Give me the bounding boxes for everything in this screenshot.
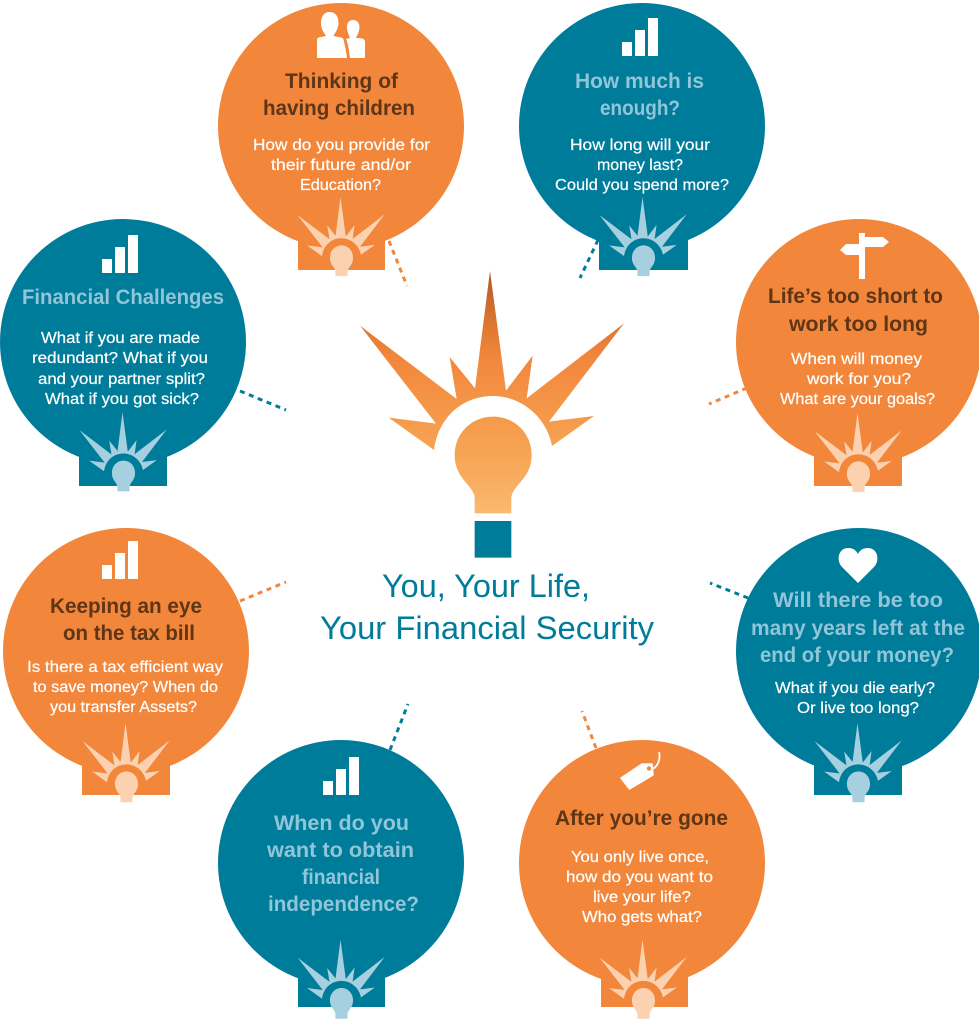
heading: [50, 595, 202, 645]
heading: How much is: [575, 70, 704, 93]
panel: financial challenges: [0, 219, 246, 491]
title: [320, 568, 654, 646]
heading: end of your money?: [760, 644, 954, 667]
heading: [263, 70, 415, 120]
body text: Could you spend more?: [555, 177, 729, 194]
body text: Is there a tax efficient way: [27, 659, 223, 676]
body text: [253, 137, 430, 194]
icon: tag: [621, 752, 660, 789]
body text: how do you want to: [566, 869, 713, 886]
heading: When do you: [274, 812, 409, 835]
heading: Financial Challenges: [22, 286, 224, 309]
central lightbulb logo: [360, 271, 624, 558]
body text: to save money? When do: [33, 679, 218, 696]
icon: bars: [102, 235, 138, 273]
dashed connector: financial independence: [390, 704, 408, 750]
body text: their future and/or: [271, 157, 411, 174]
dashed connector: tax bill: [240, 582, 286, 601]
icon: heart: [839, 548, 877, 583]
heading: work too long: [788, 313, 928, 336]
dashed connector: children: [389, 241, 407, 286]
heading: Keeping an eye: [50, 595, 202, 618]
panel: too many years left: [736, 528, 979, 802]
body text: What if you are made: [41, 330, 200, 347]
body text: redundant? What if you: [32, 350, 208, 367]
dashed connector: how much: [580, 240, 598, 278]
heading: independence?: [268, 893, 419, 916]
icon: mini logo: [600, 197, 687, 276]
heading: Thinking of: [285, 70, 399, 93]
panel: thinking of having children: [218, 3, 464, 276]
body text: [775, 680, 935, 717]
dashed connector: financial challenges: [240, 391, 286, 410]
heading: [751, 589, 965, 667]
body text: money last?: [597, 157, 683, 174]
icon: mini logo: [600, 940, 687, 1019]
heading: After you’re gone: [555, 807, 728, 830]
dashed connector: years left: [710, 583, 748, 598]
body text: What if you got sick?: [45, 391, 199, 408]
body text: What if you die early?: [775, 680, 935, 697]
body text: How long will your: [570, 137, 710, 154]
heading: financial: [302, 866, 380, 889]
heading: enough?: [600, 97, 680, 120]
heading: [266, 812, 419, 916]
body text: [32, 330, 208, 408]
icon: bars: [323, 757, 359, 795]
panel: keeping an eye on the tax bill: [3, 528, 249, 802]
heading: Life’s too short to: [768, 285, 943, 308]
dashed connector: after you're gone: [582, 711, 596, 748]
panel: how much is enough: [519, 3, 765, 276]
dashed connector: life too short: [709, 388, 747, 404]
body text: [555, 137, 729, 194]
icon: mini logo: [298, 197, 385, 276]
body text: [27, 659, 223, 716]
panel: financial independence: [218, 740, 464, 1019]
body text: [780, 351, 935, 408]
heading: on the tax bill: [63, 622, 195, 645]
icon: mini logo: [815, 723, 902, 802]
body text: You only live once,: [571, 849, 709, 866]
body text: and your partner split?: [38, 371, 205, 388]
heading: [768, 285, 943, 336]
heading: Will there be too: [773, 589, 943, 612]
icon: signpost: [840, 233, 889, 279]
heading: many years left at the: [751, 617, 965, 640]
panel: after you're gone: [519, 740, 765, 1019]
icon: bars: [102, 541, 138, 579]
body text: How do you provide for: [253, 137, 430, 154]
body text: Who gets what?: [582, 909, 702, 926]
body text: Education?: [300, 177, 381, 194]
icon: people: [317, 12, 365, 58]
heading: having children: [263, 97, 415, 120]
icon: bars: [622, 18, 658, 56]
body text: [566, 849, 713, 926]
body text: Or live too long?: [797, 700, 919, 717]
icon: mini logo: [298, 940, 385, 1019]
icon: mini logo: [815, 413, 902, 492]
body text: When will money: [791, 351, 922, 368]
icon: mini logo: [80, 412, 167, 491]
body text: What are your goals?: [780, 391, 935, 408]
heading: want to obtain: [266, 839, 414, 862]
title: Your Financial Security: [320, 610, 654, 646]
body text: work for you?: [806, 371, 911, 388]
panel: life's too short: [736, 219, 979, 492]
body text: you transfer Assets?: [50, 699, 197, 716]
title: You, Your Life,: [382, 568, 590, 604]
icon: mini logo: [83, 723, 170, 802]
heading: [575, 70, 704, 120]
body text: live your life?: [593, 889, 691, 906]
